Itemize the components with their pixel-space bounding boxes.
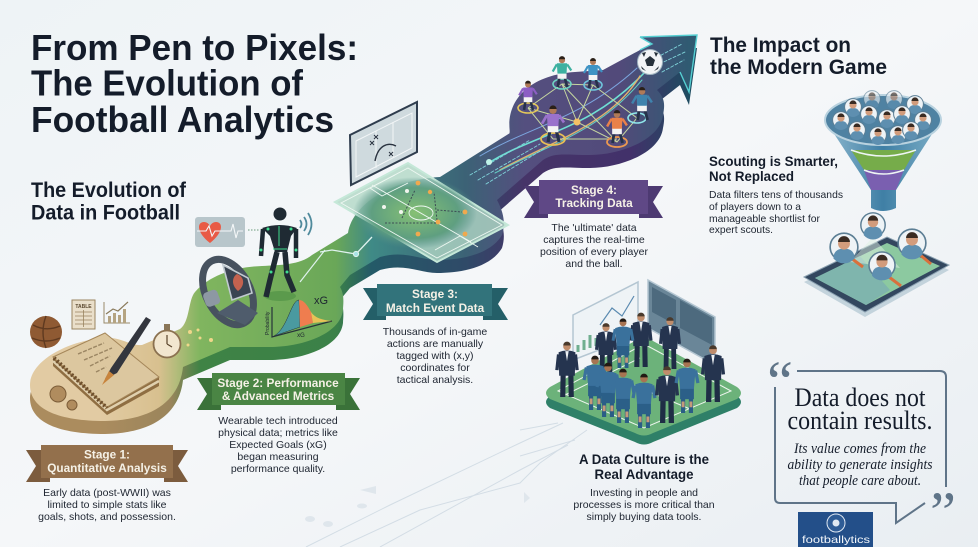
stage 2 text: Expected Goals (xG) [229, 439, 327, 451]
quote text: Data does not [794, 383, 926, 412]
player faces [833, 91, 931, 145]
scouting text: expert scouts. [709, 224, 773, 236]
stage 4 text: captures the real-time [543, 234, 645, 246]
scouting text: Data filters tens of thousands [709, 189, 843, 201]
icon: table sheet: TABLE [75, 304, 92, 310]
title: The Evolution of [31, 62, 304, 104]
data culture text [573, 487, 715, 523]
evolution path platform with arrow [30, 35, 697, 434]
data streaks [470, 44, 685, 184]
stage 2 illustration [192, 208, 332, 339]
stage 2 ribbon [197, 373, 360, 410]
icon: smart watch [192, 251, 264, 333]
stage 1 text: Early data (post-WWII) was [43, 487, 171, 499]
scouting text: manageable shortlist for [709, 213, 820, 225]
icon: stopwatch [154, 324, 180, 358]
stage 3 illustration [300, 102, 508, 282]
quote text: contain results. [788, 406, 932, 435]
icon: wifi signal [300, 213, 312, 235]
stage 1 text [38, 487, 176, 523]
quotation marks: “ [767, 349, 793, 414]
scouting text [709, 189, 843, 236]
players [519, 56, 652, 143]
stage 3 text: tactical analysis. [397, 374, 473, 386]
logo: footballytics: footballytics [802, 534, 870, 546]
heading: the impact on the modern game: the Modern Game [710, 56, 887, 79]
stage 3 text: tagged with (x,y) [396, 350, 474, 362]
quote callout [767, 349, 956, 545]
heading: the impact on the modern game [710, 34, 887, 79]
heading: evolution of data: The Evolution of [31, 179, 187, 202]
tablet with shortlisted players [804, 213, 949, 317]
icon: wearable athlete [260, 208, 298, 301]
stage 2 text [218, 415, 338, 475]
chart: xG distribution: xG [314, 295, 328, 307]
stage 4 ribbon: Stage 4: [571, 183, 617, 197]
icon: table sheet [72, 300, 95, 329]
data culture text: simply buying data tools. [587, 511, 701, 523]
scouting heading: Not Replaced [709, 168, 794, 184]
coaches and players [557, 313, 723, 428]
icon: old leather ball [30, 316, 62, 348]
data culture illustration [546, 280, 741, 444]
stage 4 text [540, 222, 648, 270]
scouting text: of players down to a [709, 201, 801, 213]
stage 4 text: and the ball. [565, 258, 623, 270]
data culture heading: A Data Culture is the [579, 451, 709, 467]
stage 1 illustration [30, 300, 213, 415]
data culture heading [579, 451, 709, 482]
icon: heart rate card [195, 217, 260, 247]
heading: the impact on the modern game: The Impact on [710, 34, 851, 57]
data culture heading: Real Advantage [594, 466, 694, 482]
green pitch base [546, 338, 741, 444]
stage 3 ribbon: Match Event Data [386, 301, 485, 315]
stage 1 ribbon: Stage 1: [84, 448, 130, 462]
stage 3 ribbon: Stage 3: [412, 287, 458, 301]
stage 3 text: Thousands of in-game [383, 326, 487, 338]
stage 2 text: physical data; metrics like [218, 427, 338, 439]
stage 2 text: began measuring [237, 451, 319, 463]
player tracking network [518, 79, 646, 147]
icon: tactics board [350, 102, 417, 185]
chart: xG distribution: xG [297, 333, 305, 339]
quotation marks: ” [930, 480, 956, 545]
quotation marks [767, 349, 956, 545]
chart: xG distribution: Probability [265, 311, 271, 335]
scouting heading [709, 153, 838, 184]
stage 1 ribbon: Quantitative Analysis [47, 461, 167, 475]
analytics screens [573, 280, 715, 365]
stage 4 ribbon: Tracking Data [555, 196, 633, 210]
stage 3 text: actions are manually [387, 338, 484, 350]
stage 3 text [383, 326, 487, 386]
quote text: that people care about. [799, 473, 921, 489]
magnifier faces [830, 213, 931, 286]
stage 2 ribbon: & Advanced Metrics [222, 389, 335, 403]
data culture text: processes is more critical than [573, 499, 715, 511]
heading: evolution of data [31, 179, 187, 224]
scouting funnel [825, 91, 941, 211]
stage 3 text: coordinates for [400, 362, 470, 374]
icon: small bar chart [104, 302, 130, 323]
stage 2 text: Wearable tech introduced [218, 415, 338, 427]
stage 4 text: position of every player [540, 246, 648, 258]
stage 1 text: goals, shots, and possession. [38, 511, 176, 523]
title: Football Analytics [31, 99, 334, 140]
data culture text: Investing in people and [590, 487, 698, 499]
stage 1 ribbon [26, 445, 188, 482]
glass pitch [335, 163, 508, 262]
stage 4 text: The 'ultimate' data [551, 222, 637, 234]
small balls [50, 386, 77, 410]
stage 2 text: performance quality. [231, 463, 325, 475]
icon: football [638, 50, 662, 74]
scouting heading: Scouting is Smarter, [709, 153, 838, 169]
chart: xG distribution [265, 295, 332, 339]
quote text: ability to generate insights [788, 457, 933, 473]
icon: notebook with pen [53, 317, 159, 415]
stage 4 ribbon [524, 180, 663, 218]
stage 4 illustration [470, 44, 685, 184]
quote text [788, 383, 933, 489]
title: From Pen to Pixels: [31, 27, 358, 68]
data path to stage 2 [300, 237, 372, 282]
stage 1 text: limited to simple stats like [47, 499, 167, 511]
data dots [186, 328, 213, 346]
title [31, 27, 358, 140]
decorative circuit lines bottom centre [305, 423, 587, 547]
quote text: Its value comes from the [793, 441, 927, 457]
logo: footballytics [798, 512, 873, 547]
heading: evolution of data: Data in Football [31, 202, 180, 224]
stage 3 ribbon [363, 284, 508, 320]
stage 2 ribbon: Stage 2: Performance [217, 376, 339, 390]
